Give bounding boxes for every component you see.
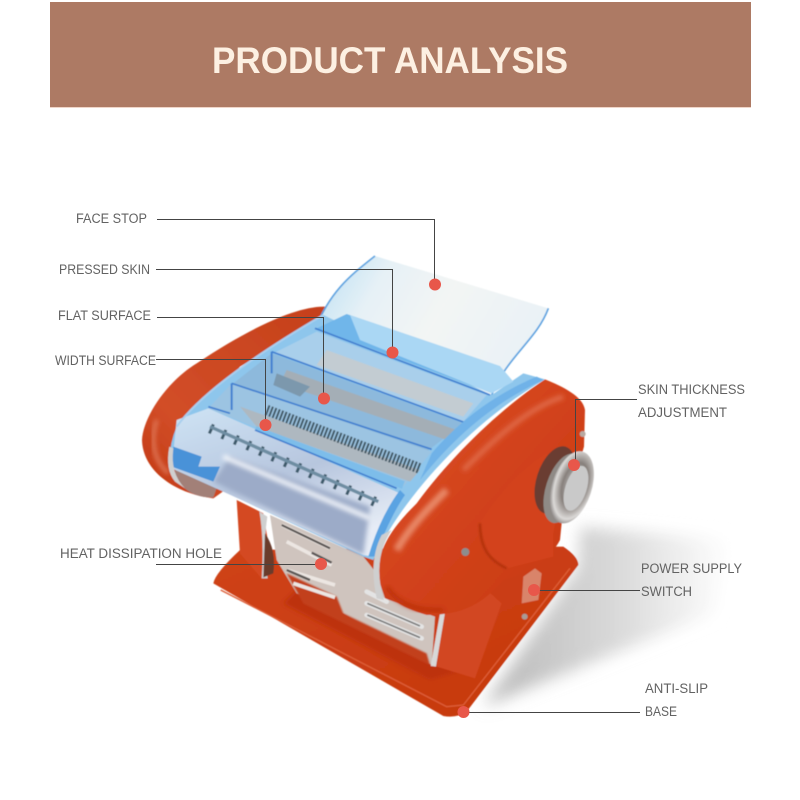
left leg: [237, 500, 273, 578]
callout: heat dissipation hole: HEAT DISSIPATION HOLE: [60, 546, 222, 561]
callout: skin thickness adjustment: ADJUSTMENT: [638, 405, 727, 420]
callout: pressed skin: PRESSED SKIN: [59, 262, 150, 277]
callout: power supply switch: SWITCH: [641, 584, 692, 599]
callout: width surface: WIDTH SURFACE: [55, 353, 156, 368]
callout: power supply switch: [528, 561, 742, 599]
callout: face stop: FACE STOP: [76, 211, 147, 226]
callout: power supply switch: POWER SUPPLY: [641, 561, 742, 576]
cast shadow: [483, 527, 730, 707]
comb cutter roller: [267, 410, 419, 468]
hopper compartments: [317, 314, 500, 392]
front panel: [172, 408, 400, 557]
callout: heat dissipation hole: [60, 546, 327, 570]
rear housing arm: [142, 307, 327, 498]
right leg: [437, 587, 502, 678]
thickness knob: [527, 441, 602, 529]
callout: face stop: [76, 211, 441, 290]
callout: anti-slip base: BASE: [645, 704, 677, 719]
title banner: [50, 2, 751, 108]
blue divider lines: [208, 328, 490, 488]
callout: anti-slip base: ANTI-SLIP: [645, 681, 708, 696]
callout: pressed skin: [59, 262, 398, 358]
right housing: [373, 379, 586, 620]
front cutter teeth: [210, 428, 378, 503]
blue roller cover: [168, 314, 545, 560]
heat dissipation panel: [263, 515, 435, 665]
callout: anti-slip base: [458, 681, 708, 719]
callout: skin thickness adjustment: [568, 382, 745, 471]
feed shield: [315, 256, 548, 395]
callout: flat surface: FLAT SURFACE: [58, 308, 151, 323]
base plate: [213, 547, 578, 717]
callout: flat surface: [58, 308, 330, 404]
callout: skin thickness adjustment: SKIN THICKNESS: [638, 382, 745, 397]
power switch: [522, 568, 542, 603]
callout: width surface: [55, 353, 272, 431]
title: PRODUCT ANALYSIS: [212, 40, 568, 81]
product illustration: pasta machine: [142, 256, 730, 717]
